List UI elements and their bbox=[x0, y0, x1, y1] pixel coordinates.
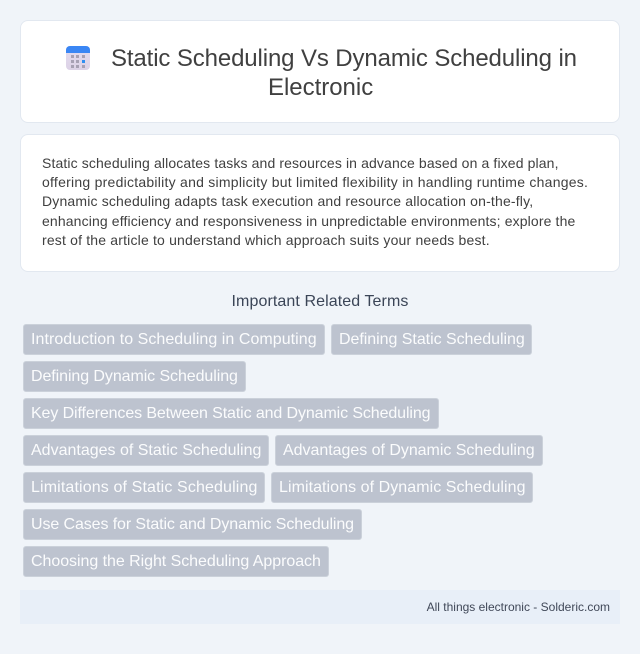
tag: Use Cases for Static and Dynamic Scheduling bbox=[31, 516, 354, 533]
summary text: offering predictability and simplicity but limited flexibility in handling runtime changes. bbox=[42, 174, 588, 190]
tag: Limitations of Dynamic Scheduling bbox=[279, 479, 526, 496]
tag bbox=[271, 472, 533, 503]
tag bbox=[23, 435, 269, 466]
summary text: enhancing efficiency and responsiveness in unpredictable environments; explore the bbox=[42, 213, 575, 229]
title card bbox=[20, 20, 620, 123]
summary text: Static scheduling allocates tasks and resources in advance based on a fixed plan, bbox=[42, 155, 559, 171]
tag bbox=[23, 361, 246, 392]
summary text: rest of the article to understand which approach suits your needs best. bbox=[42, 232, 490, 248]
tag bbox=[23, 324, 325, 355]
summary text: Dynamic scheduling adapts task execution and resource allocation on-the-fly, bbox=[42, 193, 533, 209]
tag: Key Differences Between Static and Dynamic Scheduling bbox=[31, 405, 430, 422]
title: Static Scheduling Vs Dynamic Scheduling in bbox=[111, 45, 577, 72]
tag bbox=[331, 324, 532, 355]
tag: Defining Static Scheduling bbox=[339, 331, 525, 348]
footer bar bbox=[20, 590, 620, 624]
title bbox=[111, 45, 577, 101]
tag bbox=[23, 398, 439, 429]
footer text: All things electronic - Solderic.com bbox=[427, 600, 610, 614]
tag list bbox=[23, 324, 543, 577]
tag bbox=[23, 546, 329, 577]
tag: Advantages of Dynamic Scheduling bbox=[283, 442, 535, 459]
icon: calendar bbox=[66, 46, 90, 70]
tag bbox=[23, 509, 362, 540]
tag: Advantages of Static Scheduling bbox=[31, 442, 261, 459]
summary card bbox=[20, 134, 620, 272]
title: Electronic bbox=[268, 74, 373, 101]
summary text bbox=[42, 155, 588, 248]
tag bbox=[23, 472, 265, 503]
tag: Defining Dynamic Scheduling bbox=[31, 368, 238, 385]
tag: Choosing the Right Scheduling Approach bbox=[31, 553, 321, 570]
section heading: Important Related Terms bbox=[232, 293, 408, 310]
tag bbox=[275, 435, 543, 466]
tag: Introduction to Scheduling in Computing bbox=[31, 331, 317, 348]
tag: Limitations of Static Scheduling bbox=[31, 479, 258, 496]
